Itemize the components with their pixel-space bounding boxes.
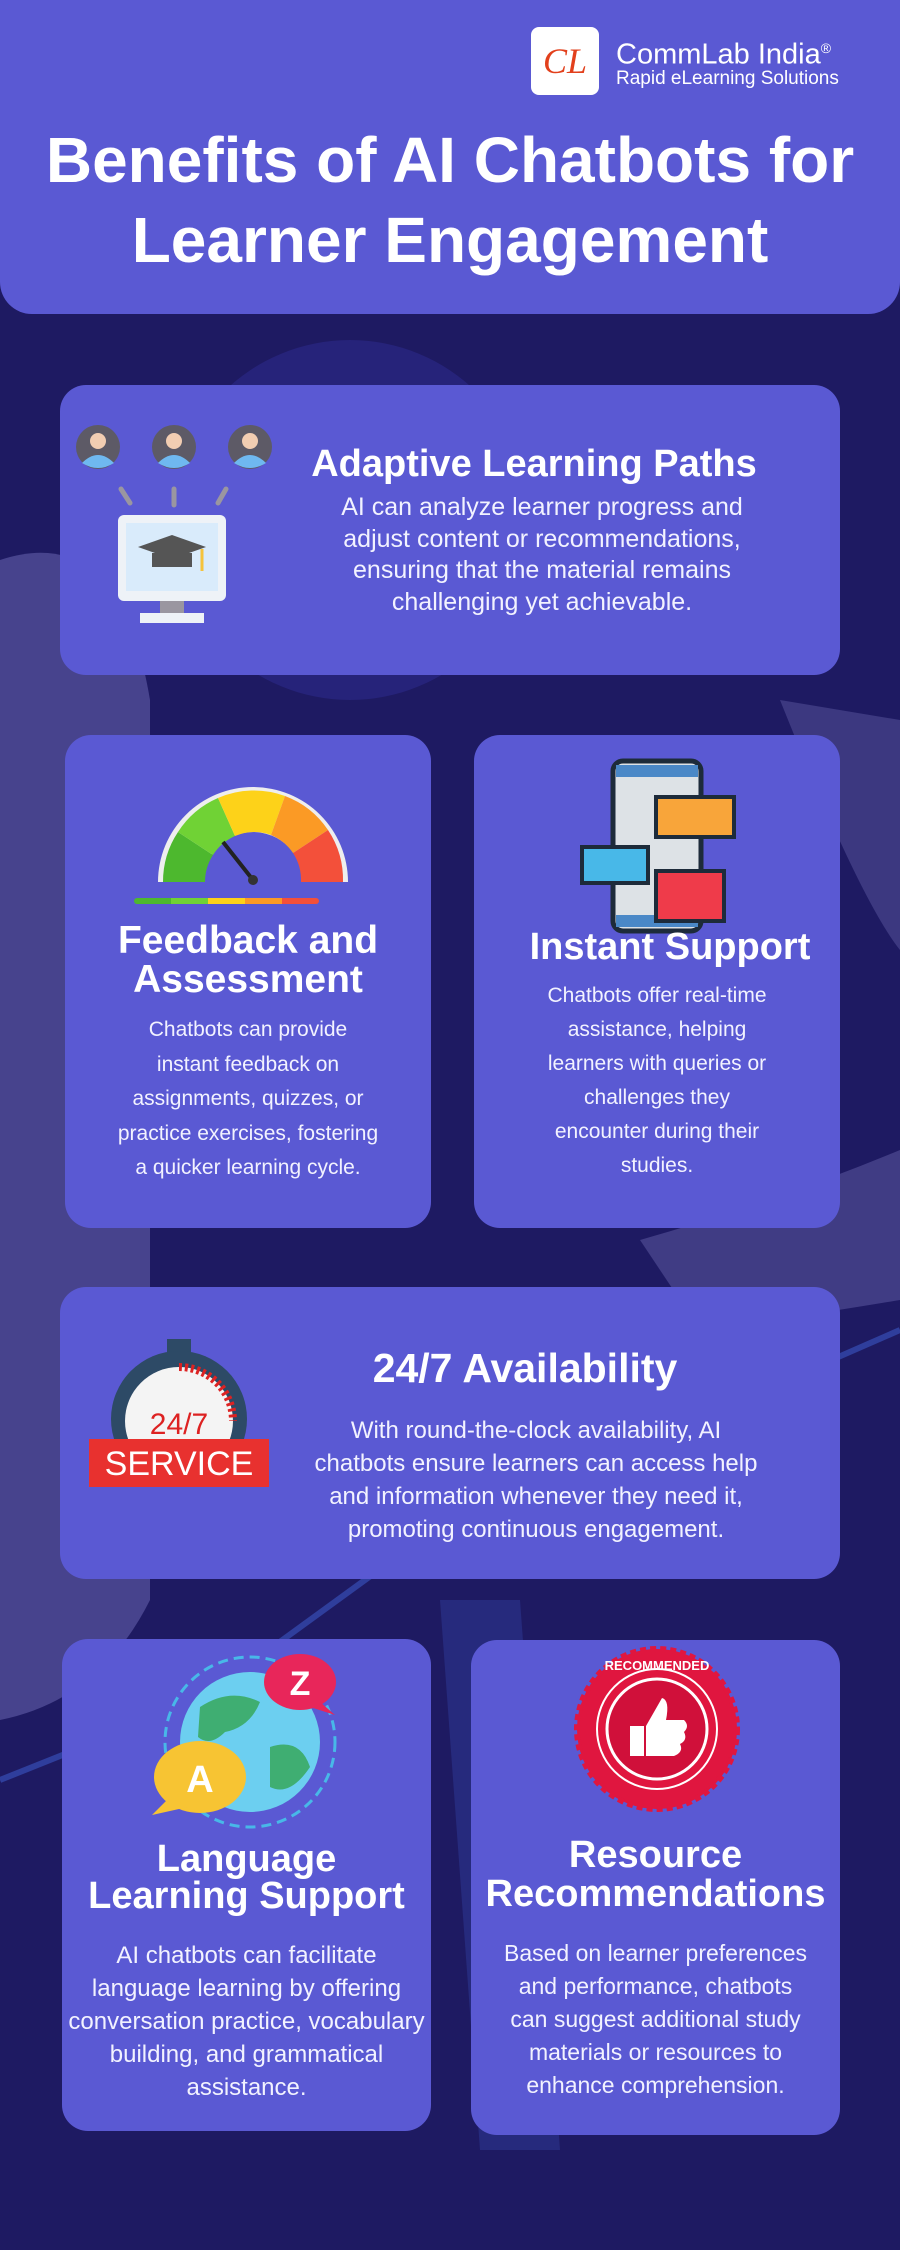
body text — [341, 493, 743, 616]
body text: learners with queries or — [548, 1052, 766, 1075]
icon: recommended badge — [574, 1646, 740, 1812]
icon: 24/7 stopwatch: 24/7 — [150, 1408, 208, 1441]
body text: conversation practice, vocabulary — [68, 2008, 425, 2035]
header panel — [0, 0, 900, 314]
heading: Recommendations — [486, 1873, 825, 1915]
title: Benefits of AI Chatbots for — [46, 124, 854, 196]
body text: With round-the-clock availability, AI — [351, 1417, 721, 1444]
icon: globe with A and Z bubbles — [152, 1654, 336, 1828]
body text: promoting continuous engagement. — [348, 1516, 724, 1543]
heading: Instant Support — [530, 926, 810, 968]
color bar — [134, 898, 319, 904]
body text: can suggest additional study — [510, 2006, 801, 2032]
body text: assistance, helping — [568, 1018, 746, 1041]
panel: feedback and assessment — [65, 735, 431, 1228]
body text: studies. — [621, 1154, 693, 1177]
heading: 24/7 Availability — [373, 1345, 677, 1391]
body text — [547, 984, 767, 1177]
body text: practice exercises, fostering — [118, 1122, 378, 1144]
body text: AI can analyze learner progress and — [341, 493, 743, 521]
panel: language learning support — [62, 1639, 431, 2131]
body text: and performance, chatbots — [519, 1973, 792, 1999]
body text: ensuring that the material remains — [353, 556, 731, 584]
body text — [118, 1018, 378, 1179]
icon: globe with A and Z bubbles: A — [186, 1759, 214, 1801]
icon: CL logo: CL — [543, 41, 587, 81]
body text: Based on learner preferences — [504, 1940, 807, 1966]
heading: Resource — [569, 1834, 742, 1876]
heading — [118, 919, 378, 1001]
icon: recommended badge: RECOMMENDED — [605, 1658, 709, 1673]
icon: 24/7 stopwatch — [89, 1339, 269, 1487]
body text — [315, 1417, 757, 1543]
icon: globe with A and Z bubbles: Z — [290, 1665, 310, 1703]
body text: encounter during their — [555, 1120, 759, 1143]
panel: 24/7 availability — [60, 1287, 840, 1579]
title — [46, 124, 854, 276]
logo: Rapid eLearning Solutions — [616, 68, 839, 89]
heading: Learning Support — [88, 1875, 405, 1917]
panel: instant support — [474, 735, 840, 1228]
body text: challenging yet achievable. — [392, 588, 692, 616]
body text — [504, 1940, 807, 2098]
logo — [531, 27, 839, 95]
icon: 24/7 stopwatch: SERVICE — [105, 1445, 253, 1483]
body text: building, and grammatical — [110, 2041, 383, 2068]
panel: adaptive learning paths — [60, 385, 840, 675]
title: Learner Engagement — [132, 204, 768, 276]
icon: learners and monitor — [76, 425, 272, 623]
body text: chatbots ensure learners can access help — [315, 1450, 757, 1477]
heading — [486, 1834, 825, 1915]
icon: gauge — [158, 787, 348, 885]
body text: a quicker learning cycle. — [135, 1156, 361, 1179]
heading: Assessment — [133, 958, 363, 1001]
body text: instant feedback on — [157, 1052, 339, 1076]
icon: phone with chat bubbles — [580, 758, 736, 934]
icon: CL logo — [531, 27, 599, 95]
body text: Chatbots offer real-time — [547, 984, 767, 1007]
body text: assignments, quizzes, or — [132, 1087, 364, 1110]
body text: and information whenever they need it, — [329, 1483, 743, 1510]
heading: Adaptive Learning Paths — [311, 443, 757, 485]
body text: materials or resources to — [529, 2039, 782, 2065]
body text — [68, 1942, 425, 2101]
heading: Language — [157, 1838, 336, 1880]
body text: language learning by offering — [92, 1975, 401, 2002]
logo text: CommLab India® — [616, 39, 831, 71]
panel: resource recommendations — [471, 1640, 840, 2135]
body text: Chatbots can provide — [149, 1018, 347, 1041]
body text: challenges they — [584, 1086, 730, 1109]
body text: AI chatbots can facilitate — [116, 1942, 377, 1969]
body text: assistance. — [186, 2074, 307, 2101]
body text: adjust content or recommendations, — [343, 524, 741, 552]
heading — [88, 1838, 405, 1917]
heading: Feedback and — [118, 919, 378, 962]
body text: enhance comprehension. — [526, 2072, 785, 2098]
